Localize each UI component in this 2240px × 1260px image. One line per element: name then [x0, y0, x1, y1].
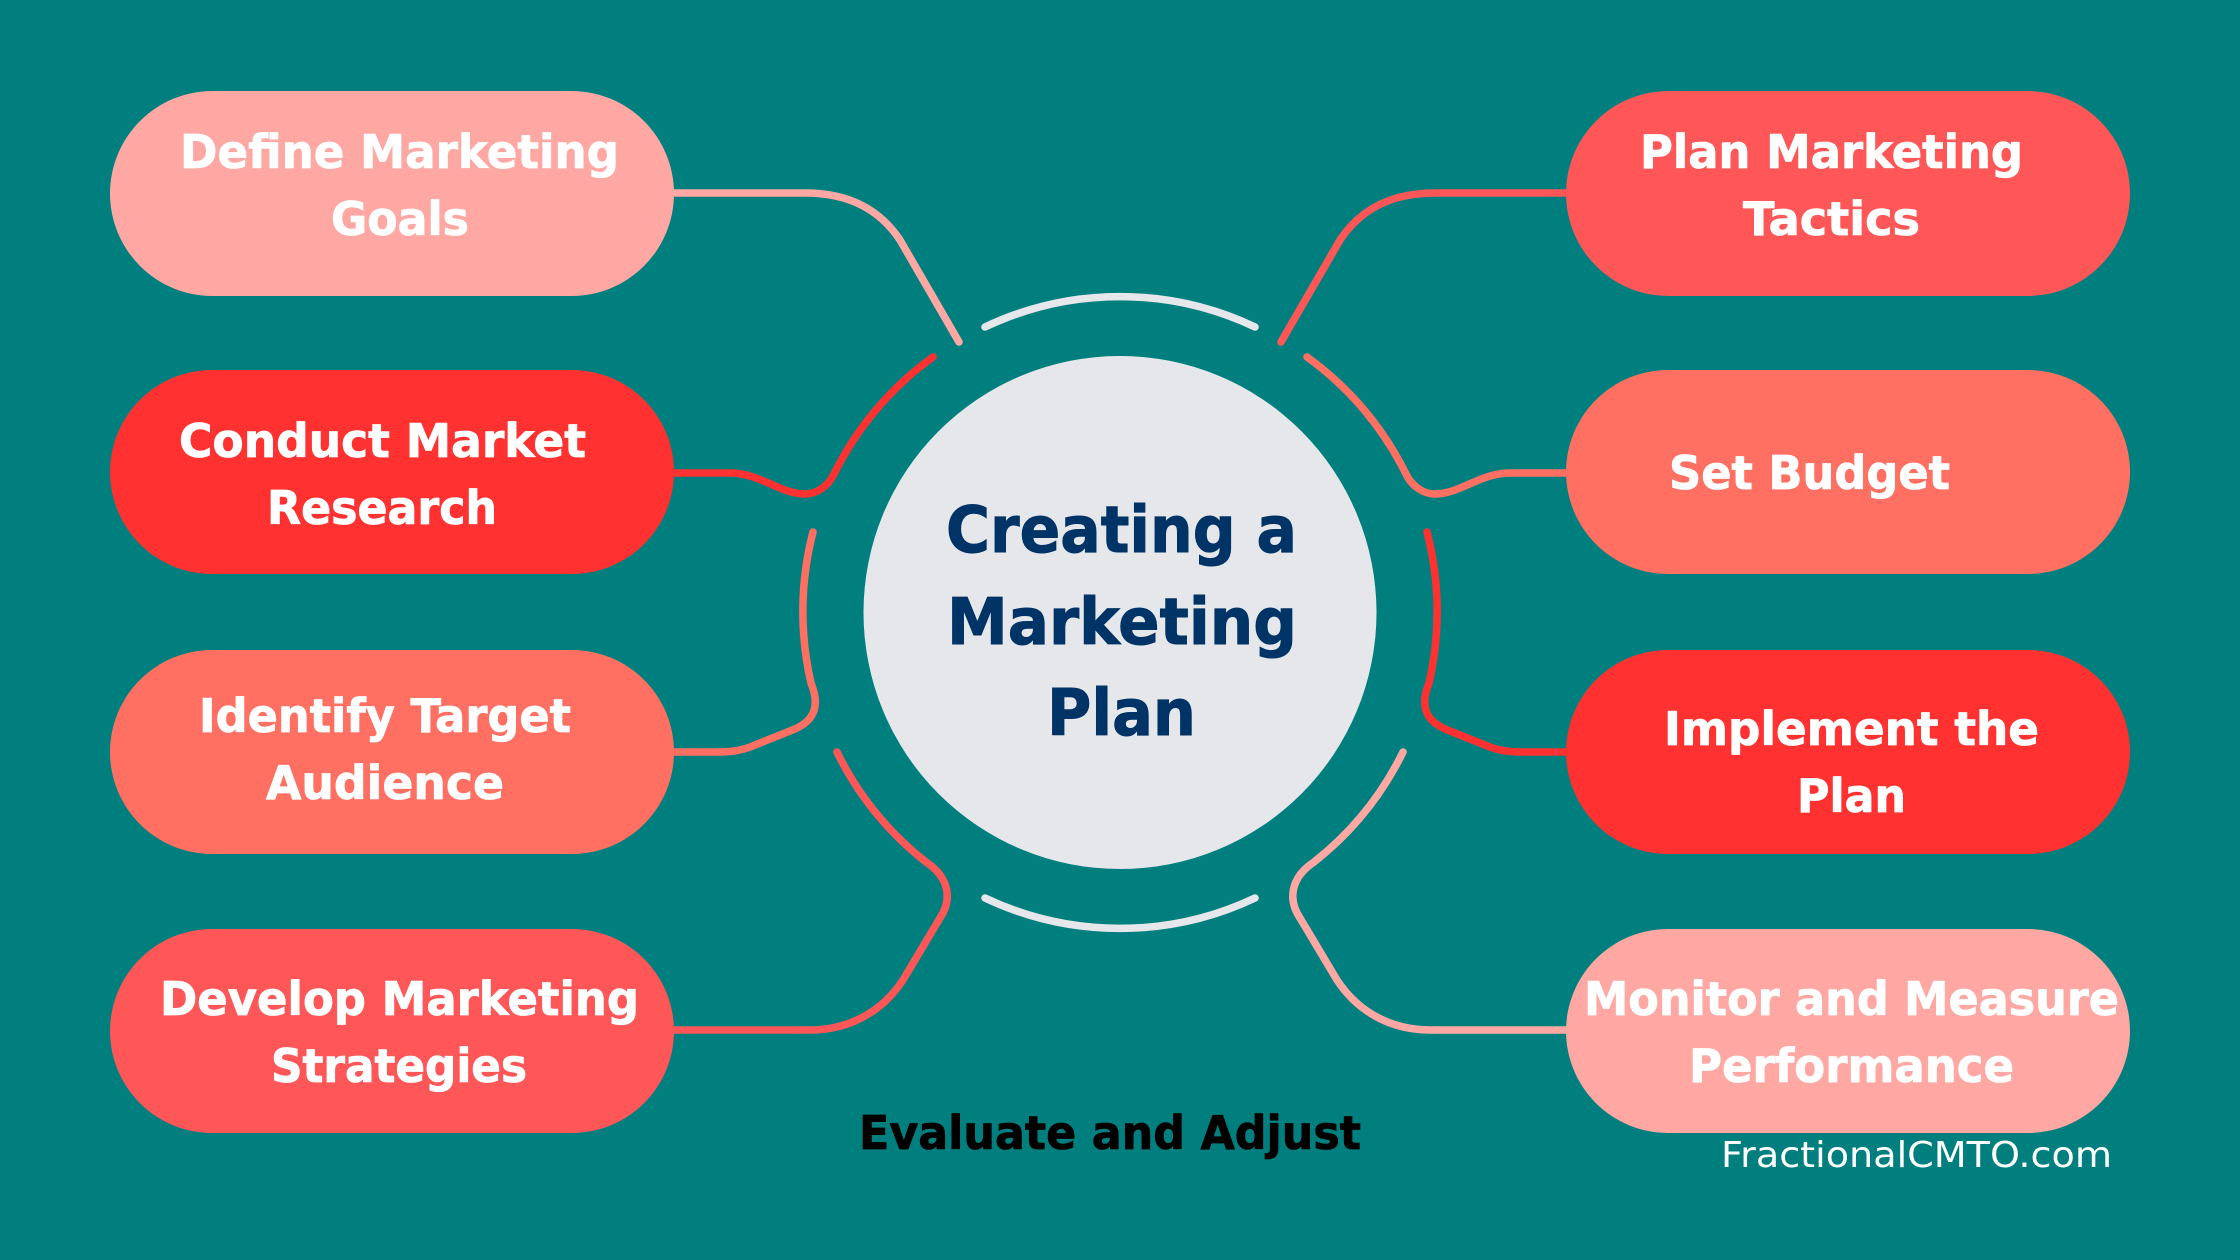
central circle — [864, 356, 1376, 869]
pill: identify target audience: Audience — [266, 756, 504, 810]
title: Marketing — [947, 586, 1297, 660]
pill: conduct market research: Conduct Market — [179, 414, 586, 468]
top arc — [985, 297, 1255, 327]
pill: set budget — [1566, 370, 2130, 574]
pill: conduct market research: Research — [267, 481, 497, 535]
title: Creating a — [946, 494, 1297, 568]
connector: implement the plan — [1425, 532, 1567, 752]
pill: identify target audience — [110, 650, 674, 854]
pill: plan marketing tactics: Plan Marketing — [1640, 125, 2023, 179]
pill: monitor and measure performance: Performance — [1689, 1039, 2014, 1093]
evaluate and adjust label: Evaluate and Adjust — [859, 1106, 1361, 1160]
pill: plan marketing tactics: Tactics — [1743, 192, 1920, 246]
pill: plan marketing tactics — [1566, 91, 2130, 296]
pill: define marketing goals: Define Marketing — [180, 125, 619, 179]
connector: monitor and measure performance — [1293, 752, 1567, 1030]
pill: identify target audience: Identify Target — [199, 689, 571, 743]
bottom arc — [985, 898, 1255, 928]
pill: implement the plan: Plan — [1797, 769, 1906, 823]
connector: set budget — [1307, 357, 1567, 494]
connector: develop marketing strategies — [673, 752, 947, 1030]
pill: implement the plan: Implement the — [1664, 702, 2039, 756]
pill: define marketing goals: Goals — [331, 192, 469, 246]
pill: define marketing goals — [110, 91, 674, 296]
connector: identify target audience — [673, 532, 815, 752]
pill: implement the plan — [1566, 650, 2130, 854]
connector: conduct market research — [673, 357, 933, 494]
title — [946, 494, 1297, 751]
pill: develop marketing strategies: Develop Marketing — [160, 972, 639, 1026]
connector: plan marketing tactics — [1281, 193, 1567, 342]
website credit: FractionalCMTO.com — [1721, 1135, 2112, 1176]
pill: monitor and measure performance: Monitor and Measure — [1584, 972, 2119, 1026]
pill: develop marketing strategies: Strategies — [271, 1039, 527, 1093]
pill: monitor and measure performance — [1566, 929, 2130, 1133]
pill: set budget: Set Budget — [1669, 446, 1950, 500]
pill: conduct market research — [110, 370, 674, 574]
connector: define marketing goals — [673, 193, 959, 342]
pill: develop marketing strategies — [110, 929, 674, 1133]
title: Plan — [1047, 677, 1196, 751]
